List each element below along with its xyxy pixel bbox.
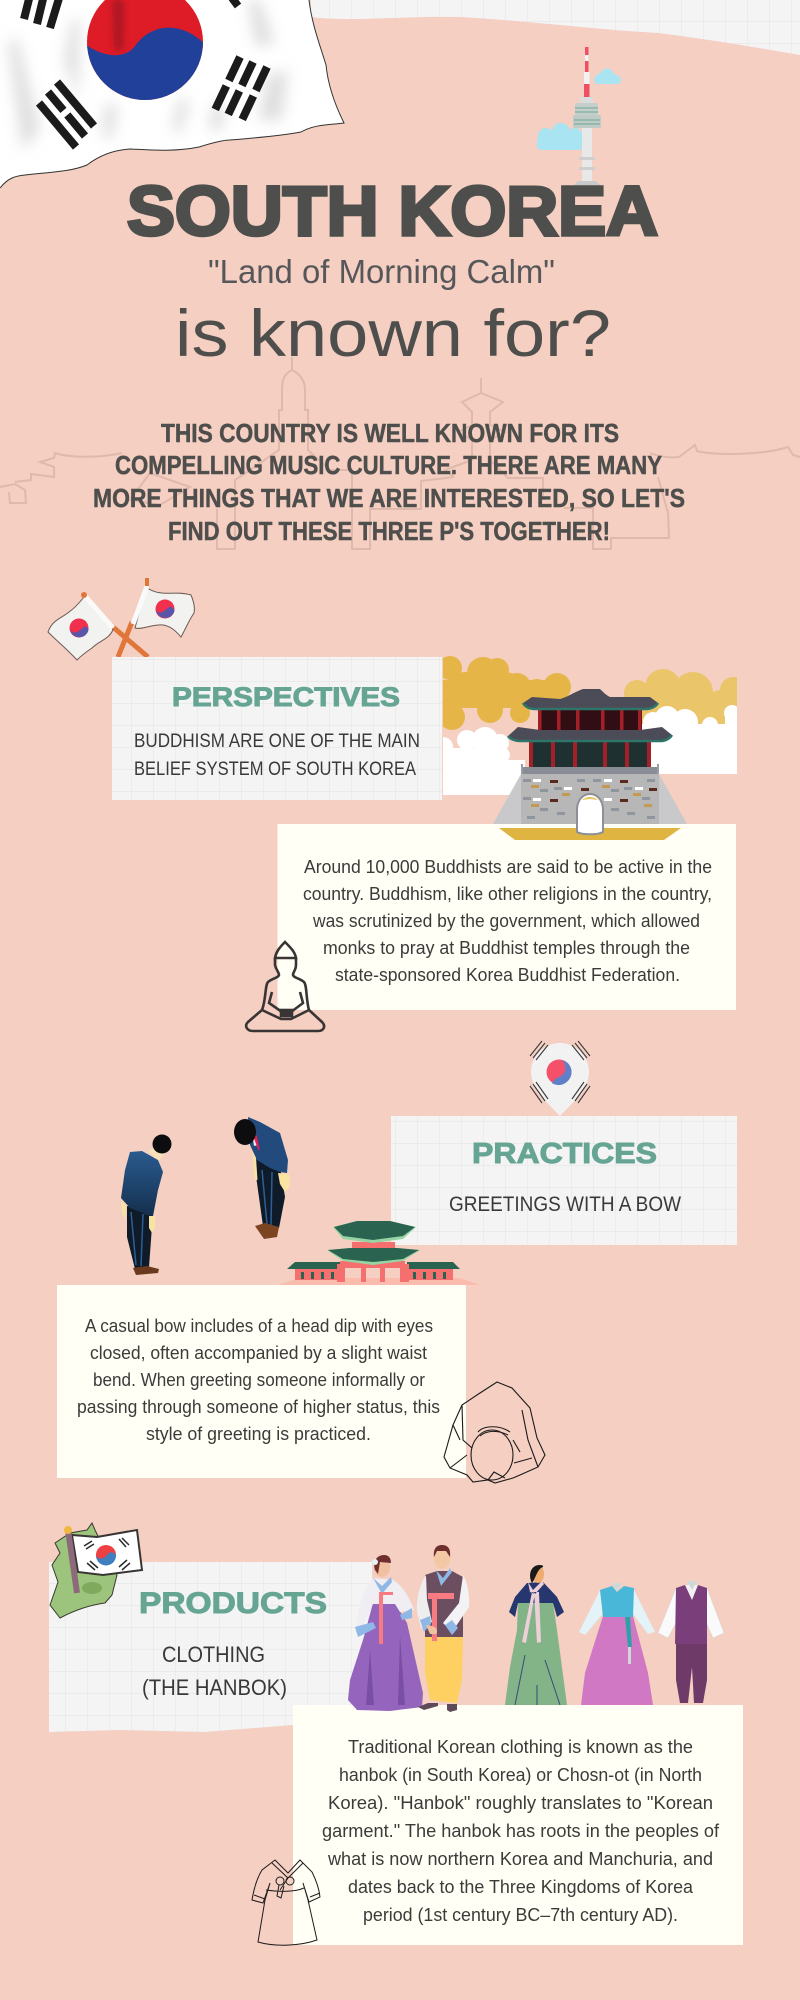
icon: korean map pin xyxy=(530,1041,590,1116)
taegeuk red half xyxy=(87,0,203,100)
icon: korean palace xyxy=(278,1221,480,1285)
national flag xyxy=(0,0,344,188)
text: bow details: passing through someone of higher status, this xyxy=(77,1397,440,1417)
figure: pink and blue hanbok dress xyxy=(579,1583,655,1705)
text: buddhism details: state-sponsored Korea Buddhist Federation. xyxy=(335,965,680,985)
text: bow details: A casual bow includes of a head dip with eyes xyxy=(85,1316,433,1336)
text: buddhism summary: BELIEF SYSTEM OF SOUTH KOREA xyxy=(134,759,416,780)
text: hanbok details: Traditional Korean clothing is known as the xyxy=(348,1737,693,1757)
heading: practices: PRACTICES xyxy=(472,1138,657,1170)
panel: perspectives clouds xyxy=(433,656,746,795)
text: bow details: closed, often accompanied by a slight waist xyxy=(90,1343,427,1363)
text: buddhism details: was scrutinized by the government, which allowed xyxy=(312,911,700,931)
text: buddhism summary: BUDDHISM ARE ONE OF THE MAIN xyxy=(134,731,420,752)
intro text block: FIND OUT THESE THREE P'S TOGETHER! xyxy=(168,516,610,546)
heading: products: PRODUCTS xyxy=(139,1587,327,1620)
icon: buddha outline xyxy=(246,942,324,1031)
icon: Seoul tower with clouds xyxy=(537,47,621,186)
text: buddhism details xyxy=(303,857,712,985)
panel: buddhism text card xyxy=(278,824,736,1010)
text: hanbok details xyxy=(322,1737,720,1925)
text: buddhism details: Around 10,000 Buddhists are said to be active in the xyxy=(304,857,712,877)
icon: bowing person top view outline xyxy=(444,1382,545,1483)
heading: is known for: is known for? xyxy=(175,296,611,370)
figure: bowing man side view xyxy=(121,1134,172,1275)
text: bow details: style of greeting is practiced. xyxy=(146,1424,371,1444)
text: buddhism details: country. Buddhism, like other religions in the country, xyxy=(303,884,712,904)
taegeuk blue half xyxy=(87,28,203,100)
text: hanbok details: dates back to the Three Kingdoms of Korea xyxy=(348,1877,694,1897)
text: bow details: bend. When greeting someone informally or xyxy=(93,1370,425,1390)
text: buddhism summary xyxy=(134,731,420,780)
figure: woman in purple hanbok xyxy=(348,1555,423,1711)
panel: products heading card xyxy=(49,1562,372,1732)
intro text block: THIS COUNTRY IS WELL KNOWN FOR ITS xyxy=(161,418,619,448)
icon: hanbok outline xyxy=(252,1860,320,1945)
figure: woman in green hanbok xyxy=(505,1565,567,1705)
heading: perspectives: PERSPECTIVES xyxy=(172,682,400,712)
text: hanbok details: Korea). "Hanbok" roughly translates to "Korean xyxy=(328,1793,713,1813)
intro text block: COMPELLING MUSIC CULTURE. THERE ARE MANY xyxy=(115,450,662,480)
text: hanbok details: garment." The hanbok has roots in the peoples of xyxy=(322,1821,720,1841)
text: hanbok details: hanbok (in South Korea) or Chosn-ot (in North xyxy=(339,1765,702,1785)
title: SOUTH KOREA xyxy=(127,172,658,250)
trigrams xyxy=(24,0,267,147)
torn grid paper top right xyxy=(311,0,800,55)
figure: man in hanbok xyxy=(417,1545,469,1712)
text: bow details xyxy=(77,1316,440,1444)
panel: hanbok text card xyxy=(293,1705,743,1945)
text: clothing: CLOTHING xyxy=(162,1642,265,1667)
background skyline outline xyxy=(0,357,800,549)
text: hanbok details: what is now northern Korea and Manchuria, and xyxy=(327,1849,713,1869)
panel: bow text card xyxy=(57,1285,466,1478)
intro text block: MORE THINGS THAT WE ARE INTERESTED, SO LET'S xyxy=(93,483,685,513)
icon: korean fortress gate xyxy=(493,689,687,840)
text: buddhism details: monks to pray at Buddhist temples through the xyxy=(323,938,690,958)
figure: bowing man front view xyxy=(234,1117,290,1239)
icon: korea map with flag xyxy=(50,1523,142,1618)
panel: perspectives heading card xyxy=(112,657,442,800)
text: the hanbok: (THE HANBOK) xyxy=(142,1675,287,1700)
subtitle: "Land of Morning Calm" xyxy=(208,253,555,290)
figure: purple men's hanbok outfit xyxy=(658,1581,724,1703)
icon: crossed flags xyxy=(48,578,194,660)
text: greetings with a bow: GREETINGS WITH A BOW xyxy=(449,1193,681,1216)
intro text block xyxy=(93,418,685,546)
panel: practices heading card xyxy=(391,1116,737,1245)
text: hanbok details: period (1st century BC–7th century AD). xyxy=(363,1905,678,1925)
